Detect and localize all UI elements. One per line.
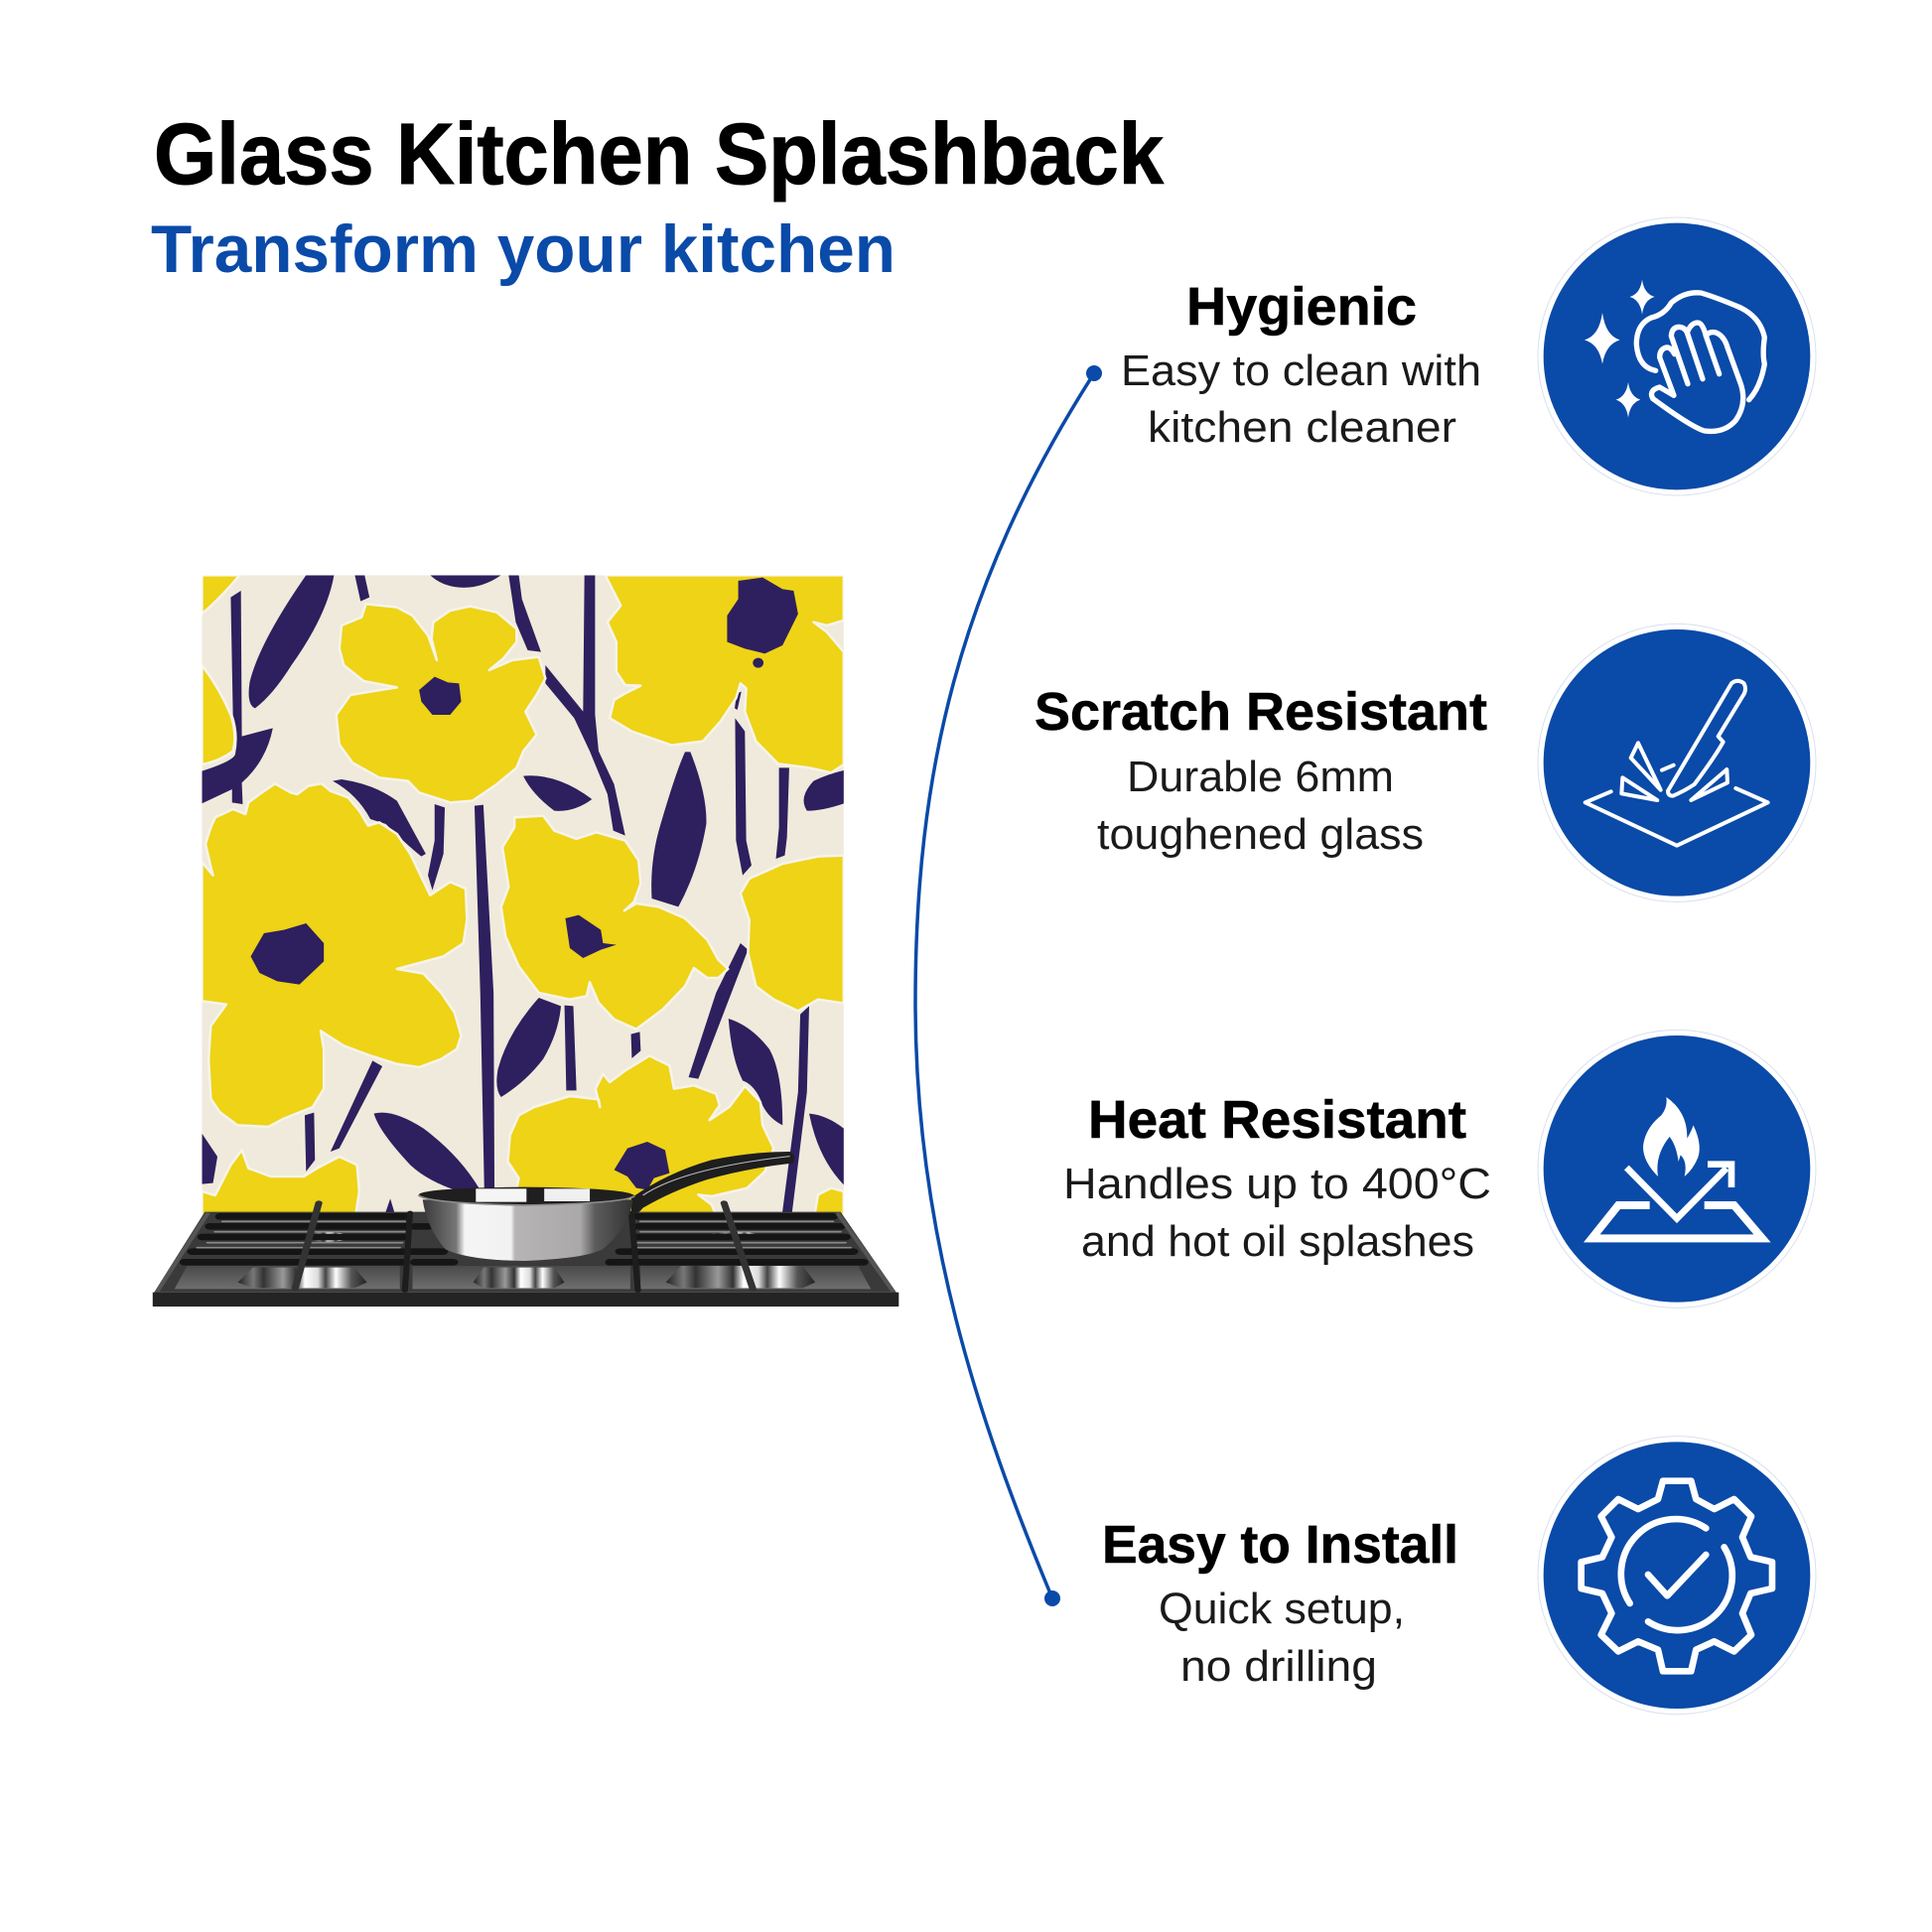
feature: hygienic text: Hygienic <box>1186 277 1417 337</box>
pan handle <box>631 1152 794 1215</box>
feature: hygienic text: kitchen cleaner <box>1148 403 1456 452</box>
feature: scratch resistant text: Scratch Resistant <box>1035 682 1487 742</box>
feature: hygienic text <box>1121 277 1481 452</box>
pan bowl <box>423 1199 632 1261</box>
title: Glass Kitchen Splashback <box>154 106 1165 203</box>
icon: knife scratching glass <box>1538 623 1816 901</box>
product image: floral glass splashback behind gas hob <box>153 575 898 1307</box>
feature: heat resistant text <box>1063 1090 1491 1266</box>
yellow flowers <box>202 575 844 1221</box>
icon: hand wiping with sparkles <box>1538 217 1816 495</box>
gas hob and pan <box>153 1152 898 1307</box>
hob trays <box>175 1266 400 1289</box>
feature: easy to install text: Quick setup, <box>1159 1585 1405 1633</box>
feature: easy to install text: no drilling <box>1180 1642 1377 1691</box>
flower centres <box>251 578 798 1189</box>
feature: hygienic text: Easy to clean with <box>1121 346 1481 395</box>
feature: heat resistant text: Heat Resistant <box>1088 1090 1466 1150</box>
feature: heat resistant text: Handles up to 400°C <box>1063 1160 1491 1208</box>
hob front edge <box>153 1293 898 1307</box>
icon: gear with check mark <box>1538 1437 1816 1715</box>
feature: scratch resistant text: toughened glass <box>1097 810 1424 859</box>
icon: flame and deflection arrow <box>1538 1030 1816 1308</box>
feature: heat resistant text: and hot oil splashes <box>1081 1217 1474 1266</box>
feature: scratch resistant text <box>1035 682 1487 859</box>
burners <box>237 1232 815 1288</box>
panel: floral splashback pattern <box>202 575 844 1221</box>
pan rim <box>419 1187 634 1205</box>
hob body <box>154 1212 897 1293</box>
grate bars <box>157 1203 894 1293</box>
subtitle: Transform your kitchen <box>151 211 896 287</box>
feature: easy to install text: Easy to Install <box>1102 1515 1458 1575</box>
navy stems and leaves <box>202 575 844 1218</box>
feature: scratch resistant text: Durable 6mm <box>1127 753 1394 801</box>
connector curve with end dots <box>915 365 1102 1606</box>
feature: easy to install text <box>1102 1515 1458 1691</box>
